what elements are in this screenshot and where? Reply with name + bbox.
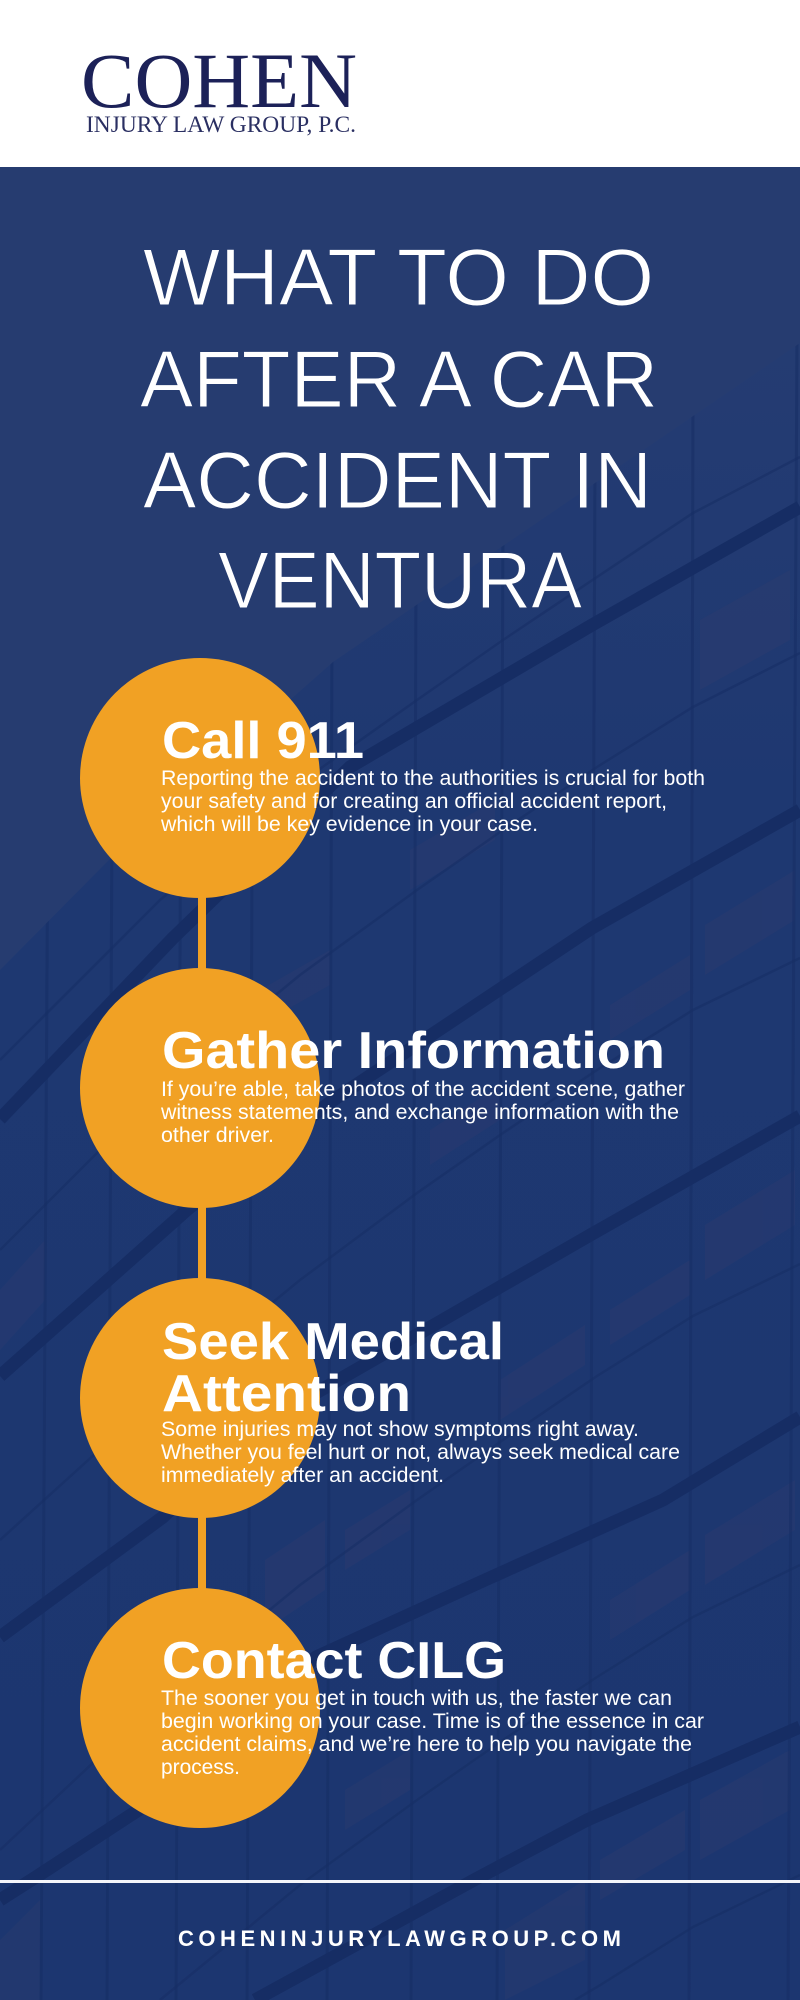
step 2 text: [160, 1077, 685, 1147]
step 1 heading: Call 911: [162, 712, 364, 770]
step 1 text: [160, 766, 705, 836]
step 3 heading: [162, 1313, 504, 1423]
step 3 text: [161, 1417, 680, 1487]
step 3 heading: Attention: [162, 1365, 411, 1423]
step 2 text: If you’re able, take photos of the accident scene, gather: [161, 1077, 685, 1101]
title: [140, 233, 658, 626]
step 2: gather information: [80, 968, 685, 1208]
step 4: contact cilg: [80, 1588, 704, 1828]
logo: COHEN: [81, 37, 357, 124]
step 1 text: Reporting the accident to the authorities is crucial for both: [161, 766, 705, 790]
step 1: call 911: [80, 658, 705, 898]
step 2 text: witness statements, and exchange information with the: [160, 1100, 679, 1124]
step 1 circle: [80, 658, 320, 898]
step 3 circle: [80, 1278, 320, 1518]
step 3 text: Some injuries may not show symptoms right away.: [161, 1417, 639, 1441]
step 2 text: other driver.: [161, 1123, 274, 1147]
footer divider: [0, 1880, 800, 1883]
title: VENTURA: [218, 536, 582, 626]
step 4 text: [161, 1686, 704, 1779]
step 4 heading: Contact CILG: [162, 1632, 506, 1690]
step 1 text: which will be key evidence in your case.: [160, 812, 538, 836]
footer website: COHENINJURYLAWGROUP.COM: [178, 1926, 621, 1951]
step 3: seek medical attention: [80, 1278, 680, 1518]
step 4 text: accident claims, and we’re here to help you navigate the: [161, 1732, 692, 1756]
step 3 text: immediately after an accident.: [161, 1463, 444, 1487]
step 4 circle: [80, 1588, 320, 1828]
logo: INJURY LAW GROUP, P.C.: [86, 112, 356, 137]
step 4 text: process.: [161, 1755, 240, 1779]
title: WHAT TO DO: [143, 233, 654, 323]
step 2 heading: Gather Information: [162, 1022, 665, 1080]
title: AFTER A CAR: [140, 335, 658, 425]
step 1 text: your safety and for creating an official accident report,: [161, 789, 667, 813]
step 2 circle: [80, 968, 320, 1208]
step 3 text: Whether you feel hurt or not, always seek medical care: [161, 1440, 680, 1464]
title: ACCIDENT IN: [143, 436, 652, 526]
connector lines: [198, 890, 206, 1595]
step 3 heading: Seek Medical: [162, 1313, 504, 1371]
header panel: [0, 0, 800, 167]
step 4 text: begin working on your case. Time is of the essence in car: [161, 1709, 704, 1733]
step 4 text: The sooner you get in touch with us, the faster we can: [161, 1686, 672, 1710]
